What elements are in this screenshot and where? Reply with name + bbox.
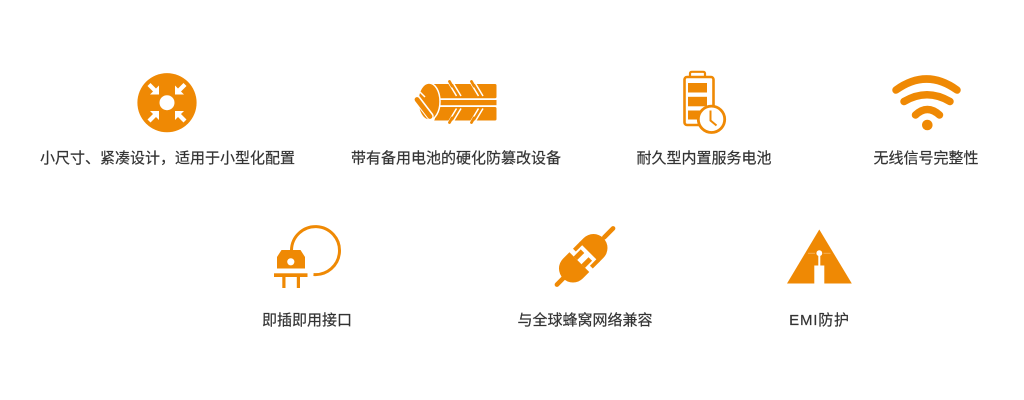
icon: wifi signal	[896, 79, 957, 130]
label: hardened tamper-proof device: 带有备用电池的硬化防篡改设备	[351, 150, 561, 167]
label: compact size: 小尺寸、紧凑设计，适用于小型化配置	[40, 150, 295, 167]
label: cellular network compatibility: 与全球蜂窝网络兼容	[517, 312, 653, 329]
icon: connecting plugs	[545, 217, 625, 296]
icon: armored cable	[416, 81, 496, 124]
icon: battery with clock	[684, 72, 725, 132]
icon: EMI protection triangle	[787, 230, 852, 284]
label: plug and play: 即插即用接口	[262, 312, 352, 329]
label: durable battery: 耐久型内置服务电池	[636, 150, 772, 167]
icon: compact size circle with inward arrows	[137, 73, 197, 132]
label: wireless signal integrity: 无线信号完整性	[873, 150, 979, 167]
label: EMI protection: EMI防护	[789, 312, 850, 329]
icon: plug with cord	[274, 227, 339, 288]
